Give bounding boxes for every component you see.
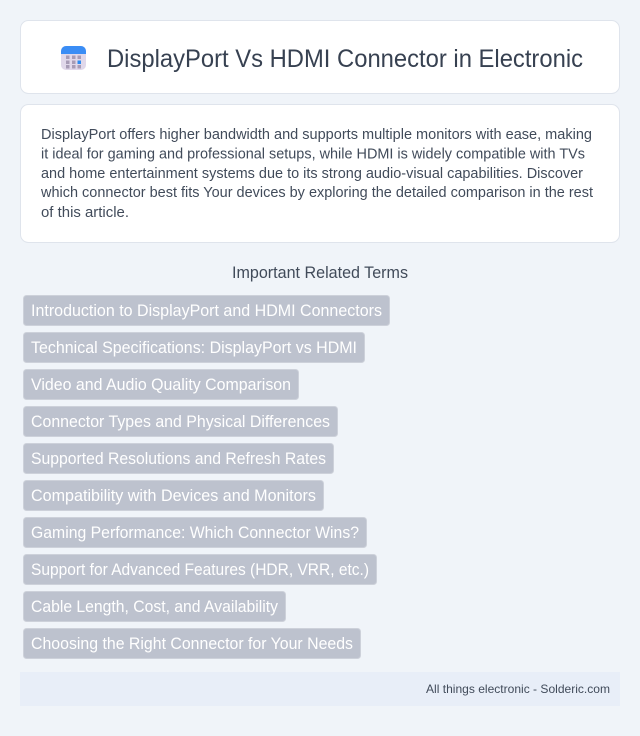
chip: cable length — [24, 592, 286, 622]
list: related term chips — [24, 296, 390, 658]
chip: compatibility — [24, 480, 324, 510]
text block: introduction paragraph: DisplayPort offers higher bandwidth and supports multiple monitors with ease, making — [41, 126, 592, 143]
text block: introduction paragraph: and home entertainment systems due to its strong audio-visual capabilities. Discover — [41, 165, 583, 182]
chip: compatibility: Compatibility with Devices and Monitors — [31, 487, 316, 505]
chip: video and audio — [24, 370, 298, 400]
footer: All things electronic - Solderic.com — [426, 682, 610, 696]
text block: introduction paragraph: which connector best fits Your devices by exploring the detailed comparison in the rest — [40, 184, 594, 201]
icon: calendar — [61, 46, 86, 70]
text block: introduction paragraph: it ideal for gaming and professional setups, while HDMI is widely compatible with TVs — [41, 146, 585, 162]
panel: introduction — [20, 104, 620, 242]
panel: title header — [20, 20, 620, 94]
chip: cable length: Cable Length, Cost, and Availability — [31, 598, 279, 616]
footer — [20, 672, 620, 706]
text block: introduction paragraph: of this article. — [41, 204, 129, 221]
chip: resolutions: Supported Resolutions and Refresh Rates — [31, 450, 326, 468]
chip: technical specifications: Technical Specifications: DisplayPort vs HDMI — [31, 339, 357, 357]
chip: connector types: Connector Types and Physical Differences — [31, 413, 330, 431]
chip: resolutions — [24, 444, 334, 474]
title: DisplayPort Vs HDMI Connector in Electronic — [107, 45, 583, 73]
heading: important related terms: Important Related Terms — [232, 264, 408, 282]
chip: gaming performance: Gaming Performance: Which Connector Wins? — [31, 524, 359, 542]
chip: video and audio: Video and Audio Quality Comparison — [31, 376, 291, 394]
chip: gaming performance — [24, 518, 366, 548]
chip: advanced features — [24, 554, 376, 584]
chip: choosing connector: Choosing the Right Connector for Your Needs — [31, 635, 353, 653]
chip: introduction: Introduction to DisplayPort and HDMI Connectors — [31, 302, 382, 320]
chip: technical specifications — [24, 332, 364, 362]
chip: choosing connector — [24, 628, 360, 658]
chip: advanced features: Support for Advanced Features (HDR, VRR, etc.) — [31, 561, 369, 579]
chip: introduction — [24, 296, 390, 326]
text block: introduction paragraph — [40, 126, 594, 221]
chip: connector types — [24, 406, 338, 436]
